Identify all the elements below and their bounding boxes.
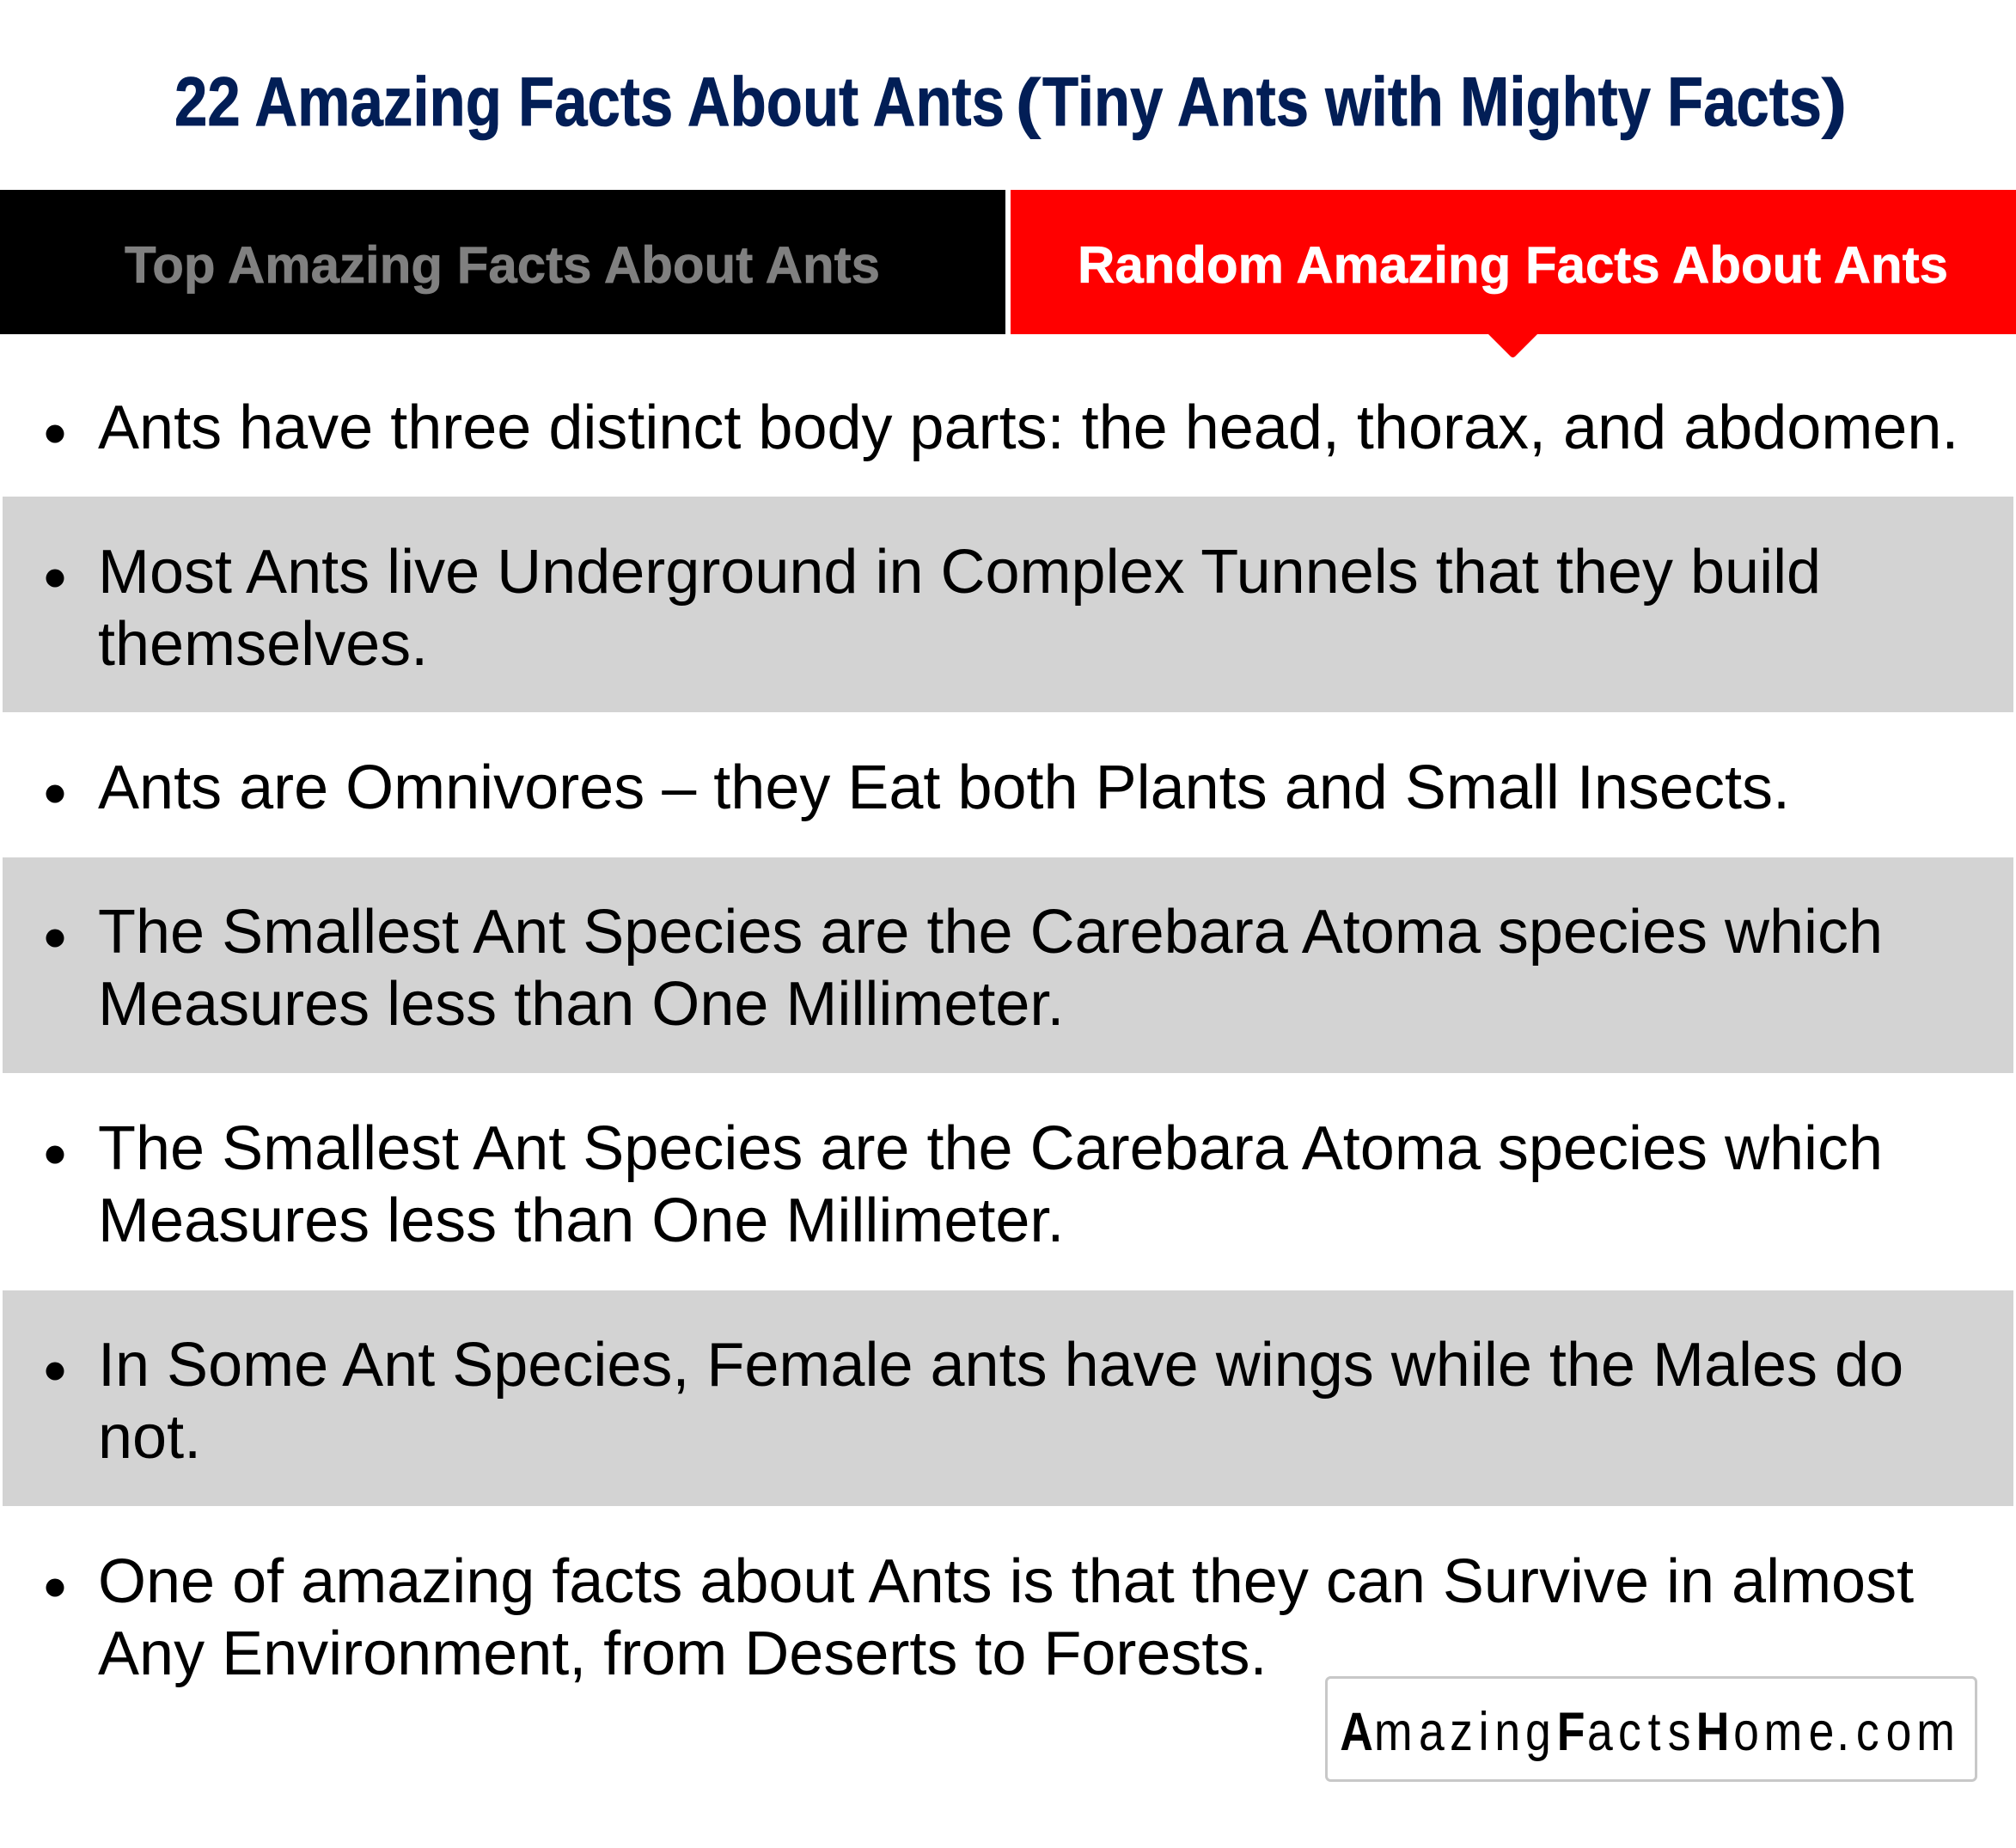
tab: random amazing facts (active) xyxy=(1011,190,2016,357)
title: ( xyxy=(1015,64,1042,140)
fact 4 row: Measures less than One Millimeter. xyxy=(98,970,1064,1039)
fact 5: The Smallest Ant Species are the Carebara Atoma species which xyxy=(98,1114,1883,1183)
fact 4 row: The Smallest Ant Species are the Carebara Atoma species which xyxy=(98,898,1883,967)
fact 5 xyxy=(46,1114,1883,1255)
title xyxy=(174,64,1848,141)
fact 6 row xyxy=(3,1290,2013,1506)
tab: top amazing facts xyxy=(0,190,1005,334)
watermark: AmazingFactsHome.com: AmazingFactsHome.com xyxy=(1340,1702,1955,1762)
fact 6 row: not. xyxy=(98,1403,201,1472)
fact 7 xyxy=(46,1547,1914,1688)
tab: top amazing facts: Top Amazing Facts About Ants xyxy=(125,236,880,294)
title: 22 Amazing Facts About Ants xyxy=(174,64,1005,141)
fact 6 row: In Some Ant Species, Female ants have wings while the Males do xyxy=(98,1331,1903,1400)
fact 5: Measures less than One Millimeter. xyxy=(98,1186,1064,1255)
fact 1: Ants have three distinct body parts: the head, thorax, and abdomen. xyxy=(98,393,1958,462)
title: Tiny Ants with Mighty Facts xyxy=(1042,64,1822,141)
fact 2 row: Most Ants live Underground in Complex Tunnels that they build xyxy=(98,538,1821,607)
fact 2 row: themselves. xyxy=(98,610,428,679)
fact 3: Ants are Omnivores – they Eat both Plants and Small Insects. xyxy=(98,753,1790,822)
fact 7: One of amazing facts about Ants is that they can Survive in almost xyxy=(98,1547,1914,1616)
tab: random amazing facts (active): Random Amazing Facts About Ants xyxy=(1078,236,1948,294)
fact 2 row xyxy=(3,497,2013,712)
fact 4 row xyxy=(3,857,2013,1073)
watermark: AmazingFactsHome.com xyxy=(1327,1677,1976,1780)
title: ) xyxy=(1821,64,1848,140)
fact 7: Any Environment, from Deserts to Forests. xyxy=(98,1619,1267,1688)
